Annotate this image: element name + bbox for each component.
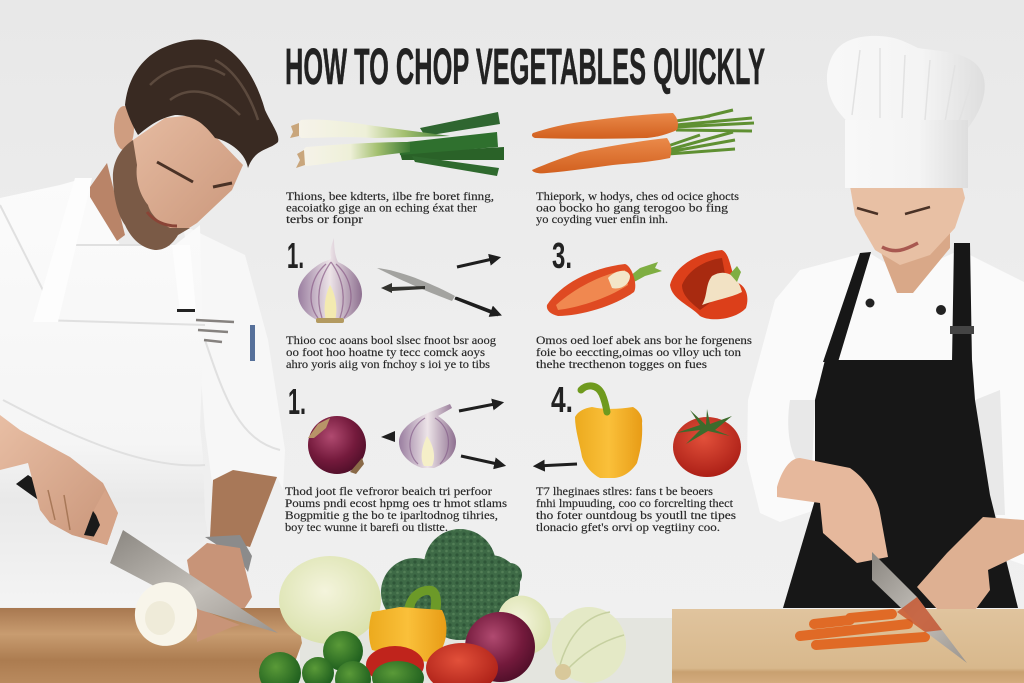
vegetable pile <box>259 529 626 683</box>
face <box>113 115 243 250</box>
red pepper <box>366 646 424 683</box>
green pepper middle <box>302 657 334 683</box>
eyes and mouth <box>857 207 930 214</box>
pen in pocket <box>250 325 255 361</box>
text block 1: Thions, bee kdterts, ilbe fre boret finng, <box>286 189 494 203</box>
right chef <box>747 36 1024 620</box>
right chef's knife <box>872 552 967 663</box>
text block 1 <box>286 189 494 226</box>
face <box>850 186 965 265</box>
text block 3: oo foot hoo hoatne ty tecc comck aoys <box>286 345 485 359</box>
step number 1: 1. <box>287 235 304 276</box>
text block 6 <box>536 484 736 534</box>
apron straps <box>823 243 972 362</box>
coat shading <box>0 205 280 465</box>
icon: spring onions <box>290 112 504 176</box>
step number 3: 3. <box>552 235 572 276</box>
green pepper lower <box>335 661 371 683</box>
icon: carrots <box>532 110 754 173</box>
carrot reflection on blade <box>897 597 942 632</box>
cabbage, small <box>488 587 560 663</box>
text block 5: Bogpmitie g the bo te iparltodnog tihries, <box>285 508 498 522</box>
right forearm <box>210 470 277 547</box>
text block 4: foie bo eeccting,oimas oo vlloy uch ton <box>536 345 741 359</box>
text block 3 <box>286 333 496 371</box>
left chef's knife and daikon <box>110 530 278 655</box>
right cutting board <box>672 609 1024 683</box>
cabbage leaf lines <box>560 612 624 672</box>
thumb <box>92 490 118 545</box>
text block 4: thehe trecthenon togges on fues <box>536 357 707 371</box>
icon: paring knife <box>377 268 498 315</box>
finger lines <box>48 490 70 530</box>
hair <box>125 39 278 168</box>
daikon cut face shade <box>145 601 175 635</box>
right sleeve shading <box>975 390 1005 515</box>
text block 3: Thioo coc aoans bool slsec fnoot bsr aoog <box>286 333 496 347</box>
red onion <box>465 612 535 682</box>
left arm and hand <box>0 415 118 545</box>
text block 5: Thod joot fle vefroror beaich tri perfoor <box>285 484 492 498</box>
green pepper left <box>259 652 301 683</box>
neck <box>880 232 950 293</box>
text block 6: fnhi lmpuuding, coo co forcrelting thect <box>536 496 734 510</box>
text block 2: oao bocko ho gang terogoo bo fing <box>536 200 728 214</box>
knife blade <box>110 530 278 633</box>
step number 4: 4. <box>551 379 573 420</box>
watch <box>205 535 252 572</box>
eyes <box>157 162 232 187</box>
cabbage, left <box>279 556 381 644</box>
left forearm and hand <box>777 458 888 563</box>
left sleeve shading <box>788 400 815 470</box>
smile <box>147 212 177 226</box>
knife handle <box>16 475 100 537</box>
arrow: row 2 up right <box>459 403 500 411</box>
text block 3: ahro yoris aiig von fnchoy s ioi ye to tibs <box>286 357 490 371</box>
text block 6: tho foter ountdoug bs youtll tne tipes <box>536 508 736 522</box>
green pepper right <box>372 661 424 683</box>
supporting hand fingers on board <box>197 608 240 642</box>
arrow: row 2 down right <box>461 456 502 465</box>
chef hat top <box>827 36 985 128</box>
arrow: row 2 left <box>537 464 577 466</box>
text block 2: yo coyding vuer enfin inh. <box>536 212 668 226</box>
icon: yellow bell pepper <box>575 386 642 478</box>
neck <box>90 163 125 241</box>
arrow: lower right <box>456 298 498 314</box>
text block 1: terbs or fonpr <box>286 212 363 226</box>
lips <box>882 243 918 251</box>
embroidery <box>196 320 234 342</box>
text block 5: Poums pndi ecost hpmg oes tr hmot stlams <box>285 496 507 510</box>
apron straps <box>33 178 196 322</box>
text block 5 <box>285 484 507 534</box>
yellow pepper <box>369 607 446 662</box>
yellow pepper stem <box>404 586 441 612</box>
broccoli <box>381 529 522 640</box>
left cutting board <box>0 608 302 683</box>
text block 4 <box>536 333 752 371</box>
buckle <box>950 326 974 334</box>
supporting hand <box>187 543 252 640</box>
icon: halved red pepper <box>670 250 747 319</box>
icon: halved onion <box>298 238 362 323</box>
ear <box>114 106 134 150</box>
step number 1, second row: 1. <box>288 381 306 422</box>
coat <box>747 250 1024 565</box>
buttons <box>866 298 874 308</box>
arrow: up right <box>457 258 497 267</box>
tomato <box>426 643 498 683</box>
carrots on board <box>800 614 925 645</box>
text block 4: Omos oed loef abek ans bor he forgenens <box>536 333 752 347</box>
left chef <box>0 39 285 640</box>
apron buckle <box>177 309 195 312</box>
cabbage core <box>555 664 571 680</box>
text block 2: Thiepork, w hodys, ches od ocice ghocts <box>536 189 739 203</box>
arrow: row 2 small left <box>381 431 395 442</box>
apron <box>783 360 1018 608</box>
handle between fingers <box>84 511 101 537</box>
text block 6: tlonacio gfet's orvi op vegtiiny coo. <box>536 520 720 534</box>
beard <box>113 140 190 250</box>
coat button <box>936 305 946 315</box>
icon: onion half <box>399 404 456 468</box>
text block 2 <box>536 189 739 226</box>
coat sleeve <box>183 225 285 490</box>
chef hat band <box>845 120 968 188</box>
coat body and apron <box>0 178 208 607</box>
arrow: left <box>381 283 425 293</box>
text block 5: boy tec wunne it barefi ou tlistte. <box>285 520 448 534</box>
daikon <box>126 573 206 655</box>
green pepper top <box>323 631 363 671</box>
hat pleats <box>852 48 972 125</box>
text block 1: eacoiatko gige an on eching éxat ther <box>286 200 477 214</box>
text block 6: T7 lheginaes stlres: fans t be beoers <box>536 484 713 498</box>
icon: tomato <box>673 409 741 477</box>
cabbage, right <box>552 607 626 683</box>
icon: red onion <box>308 416 366 474</box>
hair highlights <box>150 60 258 120</box>
icon: sliced red pepper strip <box>547 262 662 316</box>
counter surface <box>300 618 680 683</box>
right forearm and hand <box>917 517 1024 620</box>
